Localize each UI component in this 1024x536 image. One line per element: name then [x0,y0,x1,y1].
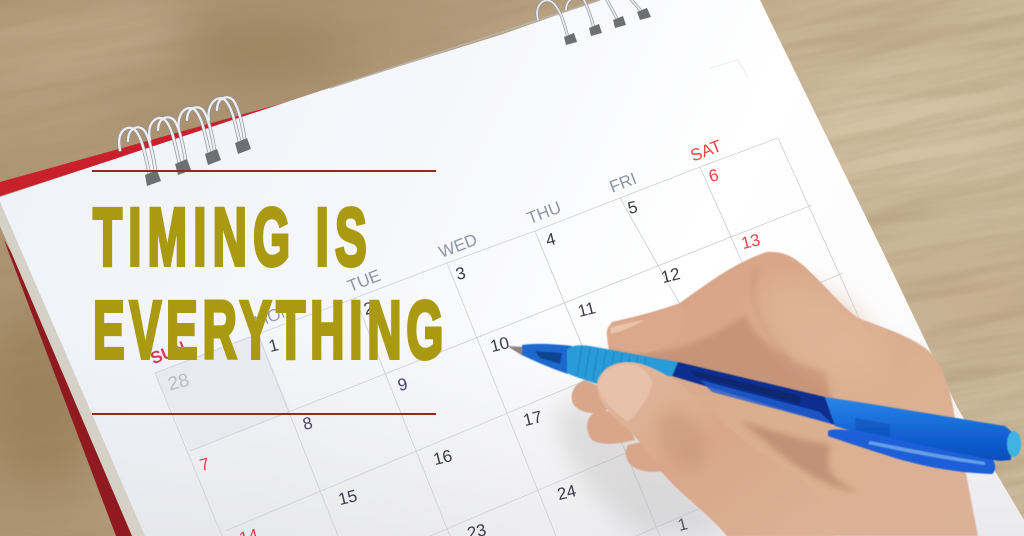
knuckle highlight [742,260,898,400]
date numbers: 2 [362,298,376,319]
thumb over the pen [597,362,835,536]
bottom decorative rule [92,413,436,415]
pen cap [825,397,1012,461]
title: EVERYTHING [93,285,443,376]
spiral rings: left group [119,97,251,186]
date numbers: 7 [198,454,212,475]
hand holding the pen [572,252,978,536]
lower fingers [572,380,668,472]
title: TIMING IS [93,192,367,283]
blue ballpoint pen [507,344,1021,474]
thumb knuckle crease [647,402,717,478]
date numbers: 24 [555,481,578,504]
weekday labels: SUN [148,338,188,368]
date numbers: 1 [267,335,281,356]
weekday labels: TUE [345,266,383,296]
spiral rings: top group [537,0,651,45]
date numbers: 4 [544,229,558,250]
date numbers: 16 [431,446,454,469]
date numbers: 3 [454,263,468,284]
crease between index finger and hand [753,268,790,360]
date numbers: 1 [676,514,690,535]
date numbers [166,165,762,536]
soft hand shadow on page [557,400,730,536]
date numbers: 11 [576,298,598,321]
shadow between index finger and pen [625,315,835,410]
date numbers: 10 [488,333,511,356]
pen metal tip [507,346,523,356]
date numbers: 6 [707,165,721,186]
date numbers: 5 [626,197,640,218]
date numbers: 28 [166,370,191,395]
calendar binding: red cover strip [0,90,330,196]
weekday labels: SAT [688,136,724,165]
thumbnail [598,364,652,422]
index fingertip [607,303,684,352]
weekday labels: WED [436,230,480,262]
pen dark barrel [672,362,835,425]
date numbers: 13 [739,230,762,253]
date numbers: 17 [521,407,544,430]
date numbers: 8 [301,413,315,434]
weekday labels: MON [251,300,295,332]
weekday labels [148,136,724,368]
pen clip [828,429,995,474]
pen front cone [522,344,572,374]
calendar grid [155,60,860,536]
date numbers: 12 [659,264,682,287]
date numbers: 9 [396,374,410,395]
calendar side edges [0,202,146,536]
pen end button [1007,431,1021,457]
weekday labels: FRI [607,169,639,197]
date numbers: 15 [336,486,359,509]
title [93,192,443,376]
top decorative rule [92,170,436,172]
weekday labels: THU [524,198,564,228]
shadow beneath the pen [740,420,860,492]
back of hand and index finger [607,252,978,536]
shaded previous month cell [155,334,291,451]
pen grip [567,345,678,385]
